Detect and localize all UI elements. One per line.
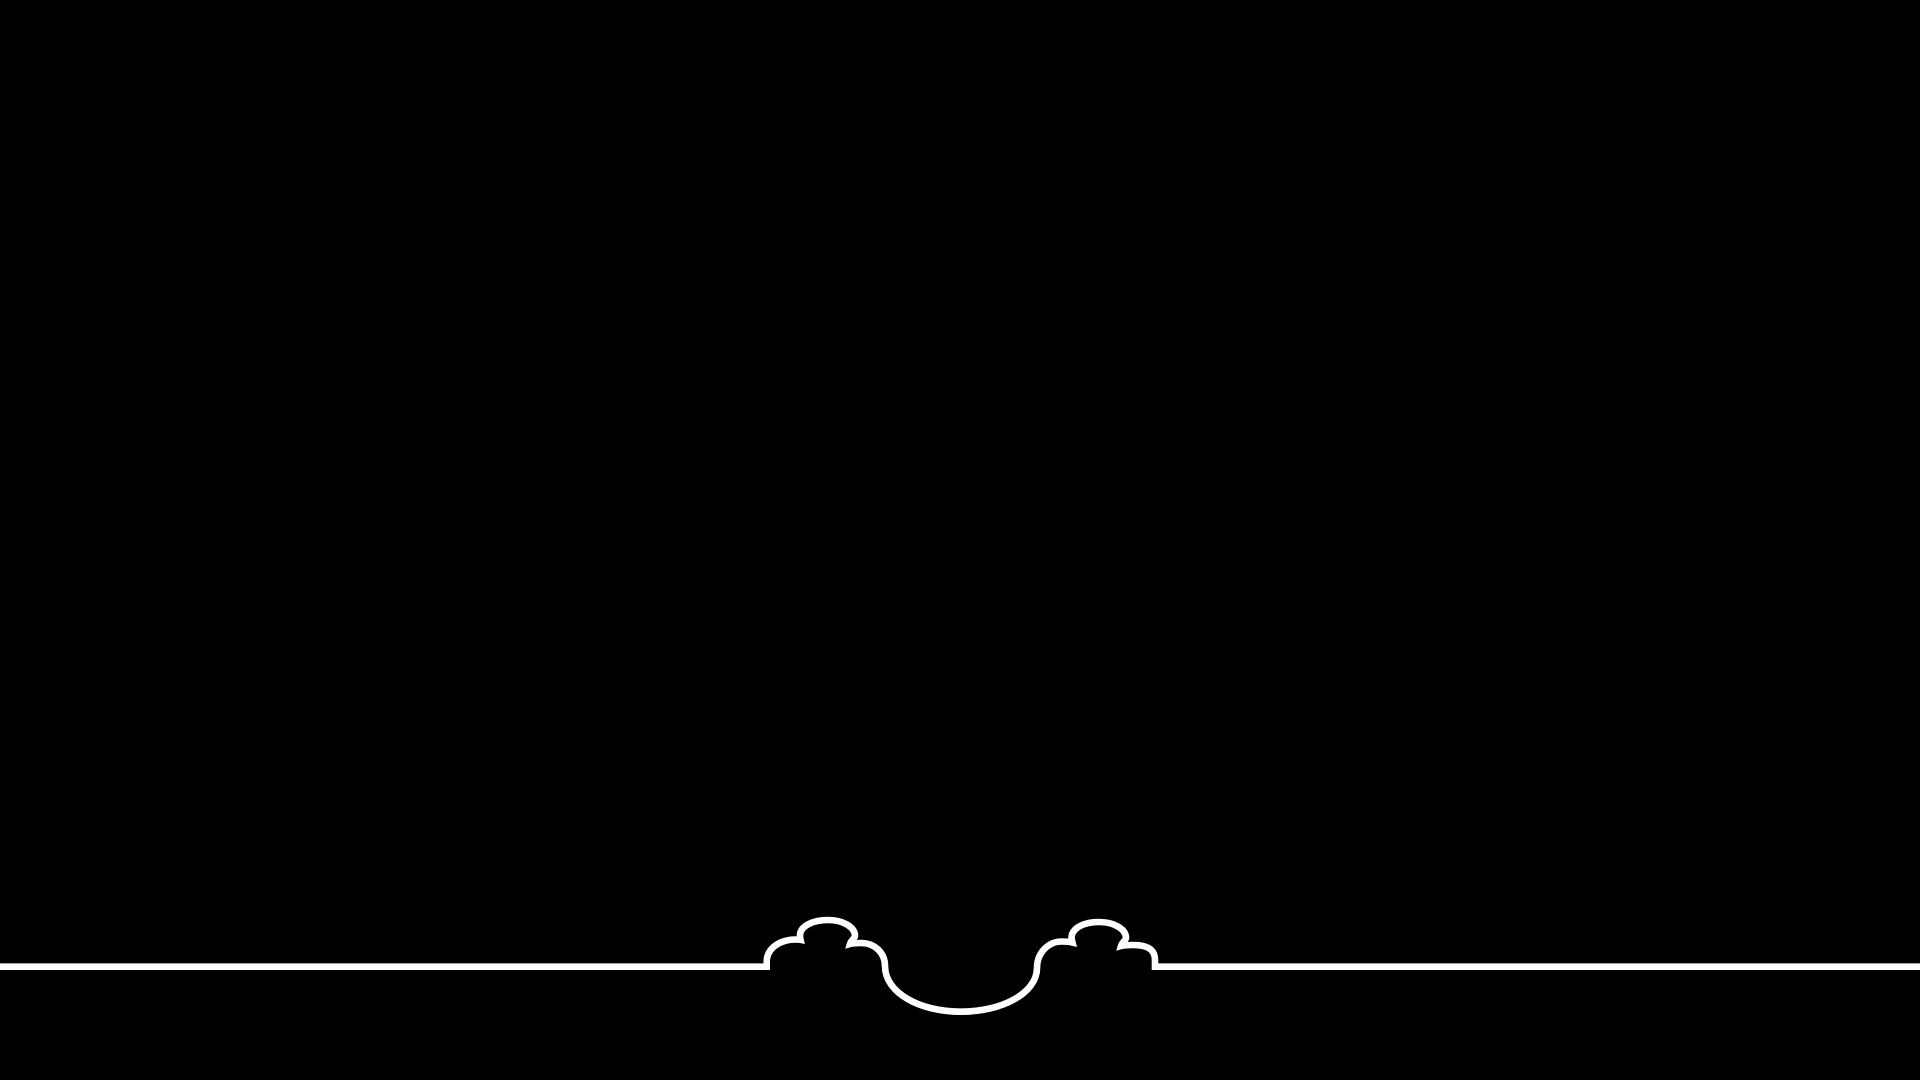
ornamental divider line with cloud-shaped central bracket [0, 920, 1920, 1012]
